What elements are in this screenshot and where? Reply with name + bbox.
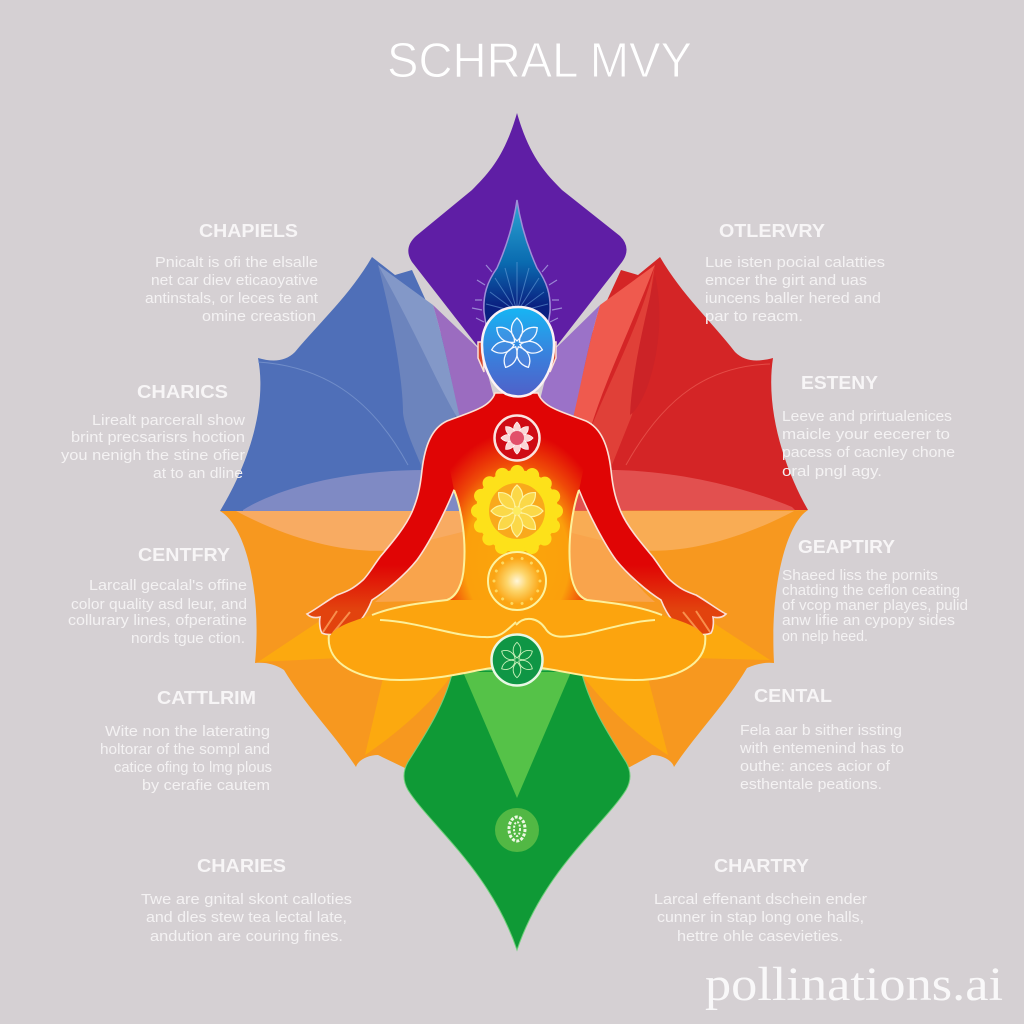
text block: CHARIES: Twe are gnital skont calloties <box>141 891 352 908</box>
text block: CATTLRIM: CATTLRIM <box>157 687 256 708</box>
petal: lavender right <box>535 305 600 420</box>
text block: CHARTRY: CHARTRY <box>714 855 810 876</box>
figure: torso and lap outline <box>329 490 705 680</box>
text block: CHARICS <box>61 381 245 482</box>
text block: CENTFRY: Larcall gecalal's offine <box>89 577 247 594</box>
text block: CHARIES: CHARIES <box>197 855 286 876</box>
text block: CHARIES: and dles stew tea lectal late, <box>146 909 347 926</box>
petal: green lower <box>404 670 630 950</box>
text block: ESTENY: pacess of cacnley chone <box>782 444 955 461</box>
text block: CENTFRY <box>68 544 247 647</box>
figure: head <box>482 307 554 396</box>
text block: GEAPTIRY: Shaeed liss the pornits <box>782 567 938 584</box>
figure: leg fold lines <box>380 619 655 637</box>
petal: red upper right <box>552 257 808 511</box>
watermark: pollinations.ai <box>705 958 1003 1011</box>
chakra: crown teardrop <box>472 200 562 325</box>
text block: OTLERVRY: par to reacm. <box>705 308 803 325</box>
text block: CENTAL <box>739 685 904 793</box>
text block: CHAPIELS <box>145 220 319 325</box>
text block: OTLERVRY: iuncens baller hered and <box>705 290 881 307</box>
text block: CHARICS: brint precsarisrs hoction <box>71 429 245 446</box>
text block: CHARTRY <box>654 855 867 945</box>
text block: ESTENY: Leeve and prirtualenices <box>782 408 952 425</box>
text block: GEAPTIRY <box>782 536 968 645</box>
text block: CENTFRY: CENTFRY <box>138 544 231 565</box>
text block: CHARICS: Lirealt parcerall show <box>92 412 245 429</box>
text block: CENTAL: with entemenind has to <box>739 740 904 757</box>
text block: GEAPTIRY: chatding the ceflon ceating <box>782 582 960 599</box>
icon: head lotus <box>490 318 544 370</box>
text block: CATTLRIM: holtorar of the sompl and <box>100 741 270 758</box>
text block: GEAPTIRY: on nelp heed. <box>782 628 868 645</box>
text block: OTLERVRY <box>705 220 885 325</box>
title: SCHRAL MVY <box>387 34 692 88</box>
figure: torso <box>442 430 592 600</box>
text block: CATTLRIM: Wite non the laterating <box>105 723 270 740</box>
text block: CHARTRY: Larcal effenant dschein ender <box>654 891 867 908</box>
text block: CENTFRY: nords tgue ction. <box>131 630 245 647</box>
text block: CHARICS: you nenigh the stine ofier <box>61 447 245 464</box>
text block: ESTENY: maicle your eecerer to <box>782 426 950 443</box>
petal: lavender left <box>433 305 500 420</box>
text block: CENTFRY: color quality asd leur, and <box>71 596 247 613</box>
text block: CHAPIELS: antinstals, or leces te ant <box>145 290 319 307</box>
text block: CENTAL: Fela aar b sither issting <box>740 722 902 739</box>
text block: GEAPTIRY: anw lifie an cypopy sides <box>782 612 955 629</box>
text block: CHARIES: andution are couring fines. <box>150 928 343 945</box>
text block: CHAPIELS: CHAPIELS <box>199 220 298 241</box>
text block: CHARICS: CHARICS <box>137 381 228 402</box>
text block: ESTENY <box>782 372 955 480</box>
figure: crossed legs <box>329 600 705 680</box>
text block: OTLERVRY: emcer the girt and uas <box>705 272 867 289</box>
text block: CHARICS: at to an dline <box>153 465 243 482</box>
chakra: root green <box>492 634 542 686</box>
text block: ESTENY: oral pngl agy. <box>782 463 882 480</box>
chakra: sun orange <box>488 552 546 610</box>
text block: OTLERVRY: Lue isten pocial calatties <box>705 254 885 271</box>
chakra: solar yellow <box>476 470 558 552</box>
figure: silhouette with shoulders and arms <box>307 393 726 635</box>
text block: CHAPIELS: Pnicalt is ofi the elsalle <box>155 254 318 271</box>
text block: GEAPTIRY: GEAPTIRY <box>798 536 896 557</box>
text block: CHARTRY: hettre ohle casevieties. <box>677 928 843 945</box>
text block: CENTFRY: collurary lines, ofperatine <box>68 612 247 629</box>
text block: CATTLRIM: catice ofing to lmg plous <box>114 759 272 776</box>
text block: CHAPIELS: net car diev eticaoyative <box>151 272 318 289</box>
text block: OTLERVRY: OTLERVRY <box>719 220 826 241</box>
text block: CHARTRY: cunner in stap long one halls, <box>657 909 864 926</box>
text block: CENTAL: outhe: ances acior of <box>740 758 891 775</box>
text block: ESTENY: ESTENY <box>801 372 879 393</box>
petal: orange right <box>515 510 808 768</box>
petal: purple crown <box>408 113 627 352</box>
petal: orange left <box>220 511 520 768</box>
text block: GEAPTIRY: of vcop maner playes, pulid <box>782 597 968 614</box>
text block: CATTLRIM: by cerafie cautem <box>142 777 270 794</box>
text block: CHARIES <box>141 855 352 945</box>
petal: blue upper left <box>220 257 480 511</box>
chakra: throat red <box>494 416 540 460</box>
text block: CENTAL: esthentale peations. <box>740 776 882 793</box>
text block: CATTLRIM <box>100 687 272 794</box>
text block: CHAPIELS: omine creastion <box>202 308 316 325</box>
figure: finger lines <box>323 611 710 633</box>
figure: ears <box>478 342 556 372</box>
chakra: lower green <box>495 808 539 852</box>
text block: CENTAL: CENTAL <box>754 685 832 706</box>
light green wedge <box>463 672 571 798</box>
